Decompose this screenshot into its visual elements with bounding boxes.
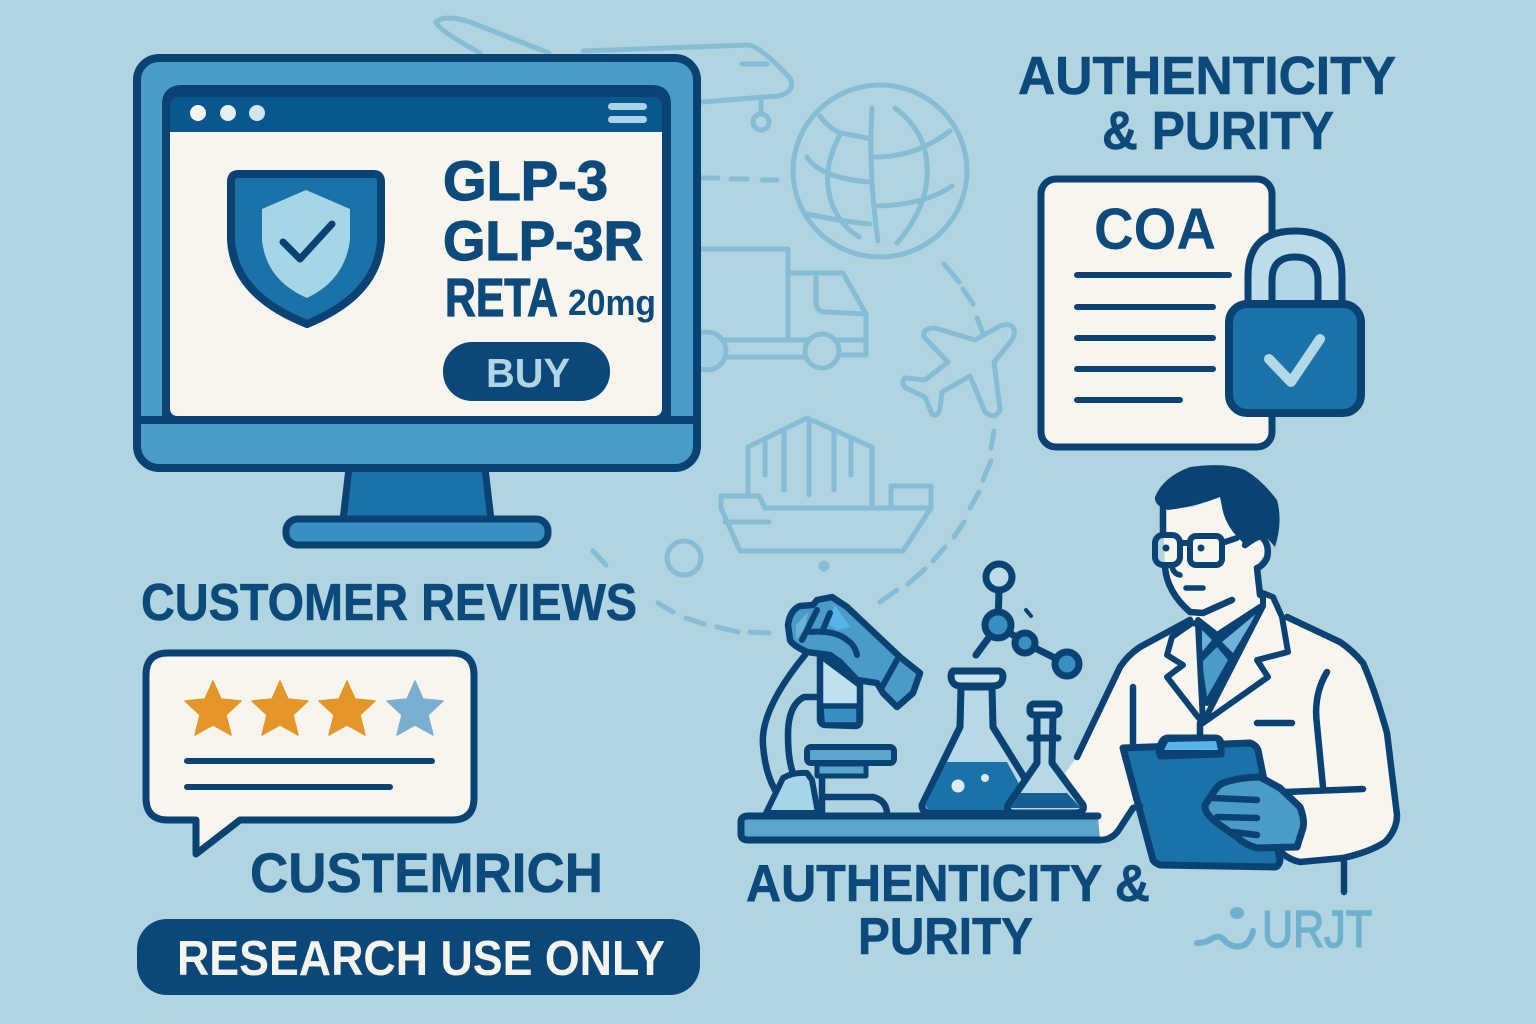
monitor base bbox=[286, 519, 548, 545]
shirt and tie bbox=[1198, 607, 1260, 703]
COA document bbox=[1041, 179, 1272, 447]
watermark logo bbox=[1197, 901, 1372, 959]
brand name: CUSTEMRICH bbox=[250, 841, 603, 904]
heading: customer reviews: CUSTOMER REVIEWS bbox=[141, 574, 637, 632]
microscope base bbox=[766, 773, 818, 813]
buy button bbox=[443, 342, 610, 401]
small erlenmeyer flask bbox=[1008, 704, 1083, 813]
eyes, nose and mouth bbox=[1162, 544, 1204, 588]
large erlenmeyer flask bbox=[922, 671, 1032, 813]
monitor bbox=[137, 58, 697, 545]
logo text: URJT bbox=[1262, 901, 1372, 959]
glasses bbox=[1155, 535, 1237, 565]
icon: delivery truck bbox=[688, 249, 866, 370]
lock body bbox=[1229, 304, 1361, 413]
browser content area bbox=[170, 132, 662, 416]
monitor body bbox=[137, 58, 697, 468]
bench top bbox=[741, 816, 1100, 840]
heading: authenticity and purity top bbox=[1018, 46, 1396, 161]
dosage: 20mg: 20mg bbox=[568, 282, 656, 323]
screen frame bbox=[166, 89, 667, 416]
molecule bbox=[976, 564, 1079, 676]
scientist bbox=[1065, 465, 1397, 892]
product name: GLP-3R: GLP-3R bbox=[443, 209, 643, 272]
heading: authenticity and purity bottom: PURITY bbox=[858, 908, 1033, 966]
microscope arm bbox=[763, 655, 818, 790]
gloved hand bbox=[1205, 777, 1304, 848]
COA label: COA bbox=[1094, 197, 1216, 262]
hair bbox=[1155, 465, 1280, 547]
logo swirl bbox=[1197, 907, 1253, 947]
lab coat bbox=[1065, 593, 1397, 862]
route dashes to globe bbox=[702, 178, 777, 180]
coat lapels bbox=[1167, 593, 1288, 723]
heading: authenticity and purity top: & PURITY bbox=[1102, 101, 1334, 161]
decorative route circle bbox=[667, 541, 701, 575]
star rating bbox=[185, 681, 443, 735]
neck and face bbox=[1163, 497, 1268, 640]
review speech bubble bbox=[146, 653, 474, 854]
microscope stage bbox=[807, 747, 894, 763]
monitor chin divider bbox=[137, 416, 697, 424]
icon: shield with check bbox=[231, 174, 381, 324]
objective lens bbox=[820, 655, 860, 726]
heading: authenticity and purity bottom: AUTHENTICITY & bbox=[746, 855, 1150, 913]
research use only pill bbox=[137, 919, 700, 995]
product name: GLP-3: GLP-3 bbox=[443, 149, 608, 212]
icon: container ship bbox=[721, 418, 931, 551]
microscope bbox=[763, 597, 920, 813]
research use only pill: RESEARCH USE ONLY bbox=[177, 932, 665, 986]
hamburger menu bbox=[608, 103, 647, 123]
lock check bbox=[1269, 339, 1320, 382]
bench curve to clipboard bbox=[1100, 806, 1140, 840]
window dots bbox=[190, 105, 265, 121]
document sheet bbox=[1041, 179, 1272, 447]
product name: RETA: RETA bbox=[445, 268, 558, 328]
clipboard bbox=[1123, 737, 1280, 867]
icon: globe bbox=[793, 85, 967, 257]
dashed route arc bbox=[593, 264, 994, 633]
document text lines bbox=[1077, 275, 1229, 400]
coat details bbox=[1133, 672, 1363, 892]
lock shackle bbox=[1248, 231, 1342, 306]
background logistics illustrations bbox=[436, 18, 1014, 633]
review text lines bbox=[187, 761, 432, 787]
icon: padlock bbox=[1229, 231, 1361, 413]
flasks bbox=[922, 671, 1083, 813]
lab bench bbox=[741, 806, 1140, 840]
icon: cargo plane bbox=[436, 18, 792, 130]
bubble outline bbox=[146, 653, 474, 854]
icon: airplane bbox=[903, 325, 1014, 416]
eyepiece tube bbox=[788, 597, 920, 707]
heading: authenticity and purity bottom bbox=[746, 855, 1150, 966]
browser header bar bbox=[170, 97, 662, 132]
buy button: BUY bbox=[486, 350, 570, 396]
monitor stand bbox=[343, 468, 491, 520]
heading: authenticity and purity top: AUTHENTICITY bbox=[1018, 46, 1396, 106]
